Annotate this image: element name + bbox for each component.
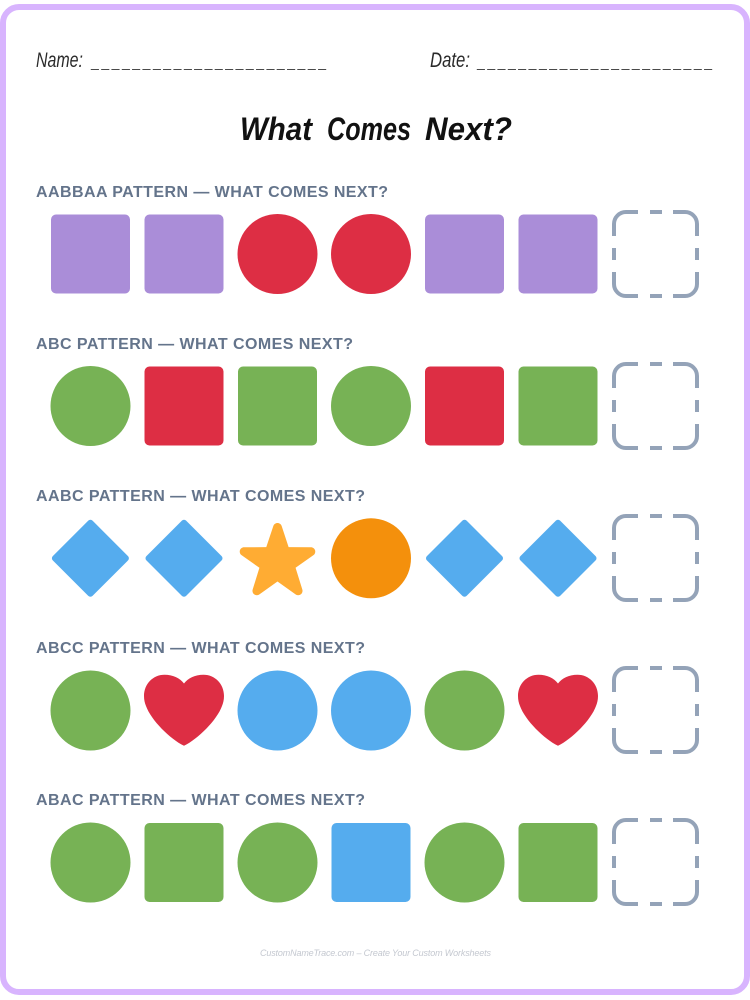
date field: _______________________ xyxy=(476,54,712,70)
panel: ABAC pattern xyxy=(36,792,697,904)
title xyxy=(240,111,512,147)
footer: CustomNameTrace.com – Create Your Custom Worksheets xyxy=(260,948,492,958)
heading: AABBAA: AABBAA PATTERN — WHAT COMES NEXT? xyxy=(36,184,388,201)
shape row: ABCC xyxy=(50,668,697,752)
panel: AABC pattern xyxy=(36,488,697,600)
title: Comes xyxy=(327,111,411,147)
title: What xyxy=(240,111,313,147)
name field xyxy=(36,49,326,72)
panel: ABC pattern xyxy=(36,336,697,448)
shape row: AABBAA xyxy=(51,212,697,296)
panel: AABBAA pattern xyxy=(36,184,697,296)
heading: ABAC: ABAC PATTERN — WHAT COMES NEXT? xyxy=(36,792,365,809)
panel: ABCC pattern xyxy=(36,640,697,752)
shape row: ABC xyxy=(50,364,697,448)
shape row: AABC xyxy=(55,516,697,600)
name field: _______________________ xyxy=(90,54,326,70)
heading: ABCC: ABCC PATTERN — WHAT COMES NEXT? xyxy=(36,640,365,657)
shape row: ABAC xyxy=(50,820,697,904)
name field: Name: xyxy=(36,49,83,72)
heading: ABC: ABC PATTERN — WHAT COMES NEXT? xyxy=(36,336,353,353)
date field xyxy=(430,49,712,72)
heading: AABC: AABC PATTERN — WHAT COMES NEXT? xyxy=(36,488,365,505)
title: Next? xyxy=(425,111,512,147)
date field: Date: xyxy=(430,49,470,72)
